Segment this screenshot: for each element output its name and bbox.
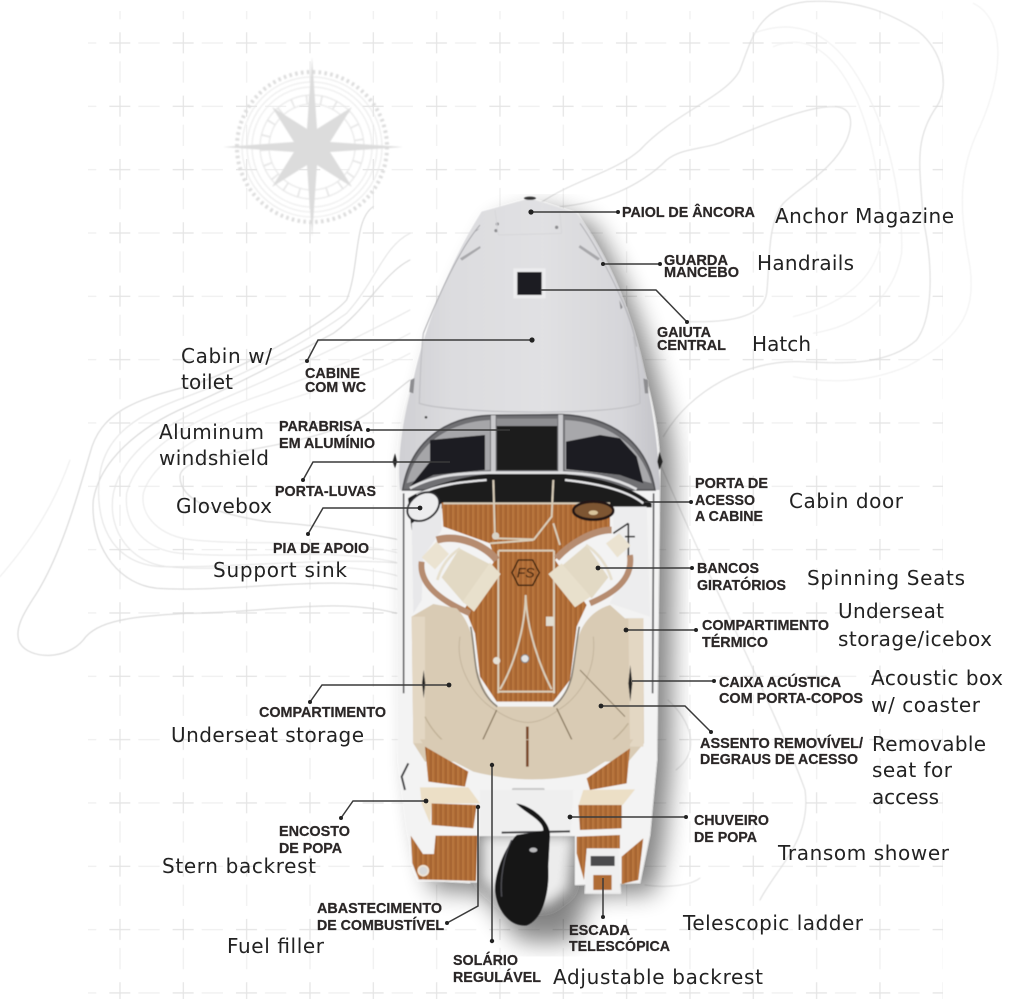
label: cabin door: ACESSO xyxy=(695,492,755,509)
label: sink: PIA DE APOIO xyxy=(273,540,369,557)
leader: ladder xyxy=(601,878,605,919)
label: fuel filler xyxy=(227,900,444,958)
label: spinning seats xyxy=(697,560,965,594)
leader lines xyxy=(301,209,716,943)
left platform xyxy=(410,833,478,882)
side rails xyxy=(404,493,654,693)
windshield posts xyxy=(493,415,561,473)
bench lower edge xyxy=(420,739,633,779)
support sink xyxy=(402,486,445,527)
label: anchor magazine xyxy=(622,203,954,228)
label: spinning seats: Spinning Seats xyxy=(807,566,965,590)
label: icebox: storage/icebox xyxy=(838,627,992,651)
cockpit side panels xyxy=(412,503,442,613)
teak step left xyxy=(425,747,468,787)
right backrest xyxy=(579,789,635,805)
leader: fuel filler xyxy=(445,805,480,925)
label: handrails: Handrails xyxy=(757,251,854,275)
leader: underseat storage xyxy=(308,683,451,704)
label: underseat storage xyxy=(171,704,386,747)
label: icebox: COMPARTIMENTO xyxy=(702,617,829,634)
label: fuel filler: ABASTECIMENTO xyxy=(317,900,442,917)
hull side spindles xyxy=(393,452,663,470)
label: hatch: CENTRAL xyxy=(657,337,726,354)
label: stern backrest: Stern backrest xyxy=(162,854,316,878)
foredeck xyxy=(393,197,663,490)
label: underseat storage: Underseat storage xyxy=(171,723,364,747)
ladder xyxy=(585,848,621,893)
label: glovebox: Glovebox xyxy=(176,494,272,518)
label: cabin xyxy=(181,344,366,396)
floor seams xyxy=(443,480,610,693)
label: glovebox xyxy=(176,483,376,518)
label: acoustic box: COM PORTA-COPOS xyxy=(719,690,863,707)
label: cabin door: A CABINE xyxy=(695,508,763,525)
leader: sink xyxy=(306,506,422,536)
label: windshield xyxy=(159,418,375,470)
outboard motor xyxy=(495,803,550,925)
right outer teak xyxy=(622,838,643,884)
motor bracket xyxy=(502,831,570,833)
label: removable seat: DEGRAUS DE ACESSO xyxy=(700,751,858,768)
label: acoustic box: w/ coaster xyxy=(871,693,981,717)
label: spinning seats: GIRATÓRIOS xyxy=(697,576,786,594)
steering wheel xyxy=(573,502,613,520)
left seat xyxy=(421,538,501,613)
label: cabin: toilet xyxy=(181,370,233,394)
cleat xyxy=(418,866,428,876)
label: glovebox: PORTA-LUVAS xyxy=(275,483,376,500)
leader: spinning seats xyxy=(596,566,694,570)
leader: adjustable backrest xyxy=(490,763,494,943)
leader: removable seat xyxy=(599,704,713,734)
label: ladder xyxy=(569,911,864,955)
label: hatch: Hatch xyxy=(752,332,811,356)
label: cabin door xyxy=(695,475,904,525)
leader: cabin door xyxy=(645,500,693,504)
label: spinning seats: BANCOS xyxy=(697,560,759,577)
label: handrails: GUARDA xyxy=(664,252,728,269)
label: sink: Support sink xyxy=(213,558,347,582)
hull xyxy=(397,198,660,885)
boat shadow xyxy=(411,208,674,942)
label: removable seat xyxy=(700,732,986,809)
cockpit xyxy=(402,474,654,762)
contours: left landmass xyxy=(0,207,410,655)
left side rail xyxy=(402,763,408,790)
label: transom shower: CHUVEIRO xyxy=(694,812,769,829)
compass rose xyxy=(223,57,403,237)
compass rings xyxy=(237,72,387,222)
label: anchor magazine: Anchor Magazine xyxy=(775,204,954,228)
label: handrails: MANCEBO xyxy=(664,264,739,281)
helm white arc xyxy=(417,480,643,503)
left backrest xyxy=(420,787,480,823)
stern xyxy=(402,739,643,925)
leader: windshield xyxy=(366,428,510,432)
label: removable seat: seat for xyxy=(872,758,953,782)
left seat teak xyxy=(432,803,477,828)
label: anchor magazine: PAIOL DE ÂNCORA xyxy=(622,203,755,221)
deck fittings xyxy=(409,222,648,419)
label: removable seat: access xyxy=(872,785,939,809)
label: windshield: PARABRISA xyxy=(279,418,363,435)
contours: right landmass xyxy=(540,1,998,437)
label: acoustic box xyxy=(719,666,1003,717)
leader: hatch xyxy=(541,290,689,324)
bench side strips xyxy=(412,617,643,747)
label: transom shower xyxy=(694,812,950,865)
inner rim of bench xyxy=(471,627,579,707)
windshield frame xyxy=(403,415,655,490)
compass star xyxy=(223,57,403,237)
label: ladder: TELESCÓPICA xyxy=(569,937,670,955)
label: cabin: CABINE xyxy=(305,365,360,382)
leader: handrails xyxy=(601,262,662,266)
label: icebox: TÉRMICO xyxy=(702,634,768,651)
teak floor xyxy=(442,503,610,702)
label: cabin: COM WC xyxy=(305,379,366,396)
hatch xyxy=(513,268,546,298)
label: removable seat: ASSENTO REMOVÍVEL/ xyxy=(700,735,864,752)
right seat teak xyxy=(578,805,622,830)
leader: acoustic box xyxy=(632,679,716,683)
label: stern backrest xyxy=(162,823,350,878)
label: handrails xyxy=(664,251,854,281)
leader: stern backrest xyxy=(339,799,428,820)
label: acoustic box: CAIXA ACÚSTICA xyxy=(719,673,841,691)
label: cabin door: Cabin door xyxy=(789,489,904,513)
label: hatch: GAIUTA xyxy=(657,324,711,341)
right platform xyxy=(577,835,620,880)
label: transom shower: Transom shower xyxy=(777,841,950,865)
transom deck xyxy=(480,790,573,835)
label: windshield: windshield xyxy=(159,446,269,470)
label: ladder: Telescopic ladder xyxy=(682,911,864,935)
deck edge lines xyxy=(419,333,640,412)
label: cabin: Cabin w/ xyxy=(181,344,272,368)
label: underseat storage: COMPARTIMENTO xyxy=(259,704,386,721)
console dark area xyxy=(408,474,652,530)
windshield: right pane xyxy=(565,420,652,483)
label: removable seat: Removable xyxy=(872,732,986,756)
label: fuel filler: Fuel filler xyxy=(227,934,325,958)
floor fittings xyxy=(492,532,554,664)
hexagon logo: FS xyxy=(517,564,535,580)
label: acoustic box: Acoustic box xyxy=(871,666,1003,690)
label: icebox xyxy=(702,599,992,651)
leader: transom shower xyxy=(568,815,688,819)
label: fuel filler: DE COMBUSTÍVEL xyxy=(317,917,444,934)
teak step right xyxy=(587,748,630,790)
label: cabin door: PORTA DE xyxy=(695,475,768,492)
swim platform shade xyxy=(482,835,574,905)
label: stern backrest: DE POPA xyxy=(279,840,342,857)
label: windshield: EM ALUMÍNIO xyxy=(279,435,375,452)
hexagon logo xyxy=(512,560,539,585)
contours: lower right xyxy=(650,440,806,900)
bow tip xyxy=(524,197,536,200)
label: hatch xyxy=(657,324,811,356)
label: icebox: Underseat xyxy=(838,599,944,623)
label: adjustable backrest: REGULÁVEL xyxy=(453,969,541,986)
acoustic boxes xyxy=(422,665,632,702)
label: adjustable backrest xyxy=(453,952,763,989)
leader: cabin xyxy=(305,337,535,363)
leader: icebox xyxy=(624,628,698,632)
label: stern backrest: ENCOSTO xyxy=(279,823,350,840)
label: windshield: Aluminum xyxy=(159,420,264,444)
label: transom shower: DE POPA xyxy=(694,829,757,846)
label: ladder: ESCADA xyxy=(569,922,630,939)
windshield: left pane xyxy=(407,420,490,483)
label: adjustable backrest: Adjustable backrest xyxy=(553,965,763,989)
windshield: centre pane xyxy=(497,419,557,470)
boat top view xyxy=(393,197,674,942)
label: adjustable backrest: SOLÁRIO xyxy=(453,952,518,969)
throttle xyxy=(613,523,635,560)
right seat xyxy=(548,530,631,607)
label: sink xyxy=(213,540,369,582)
U-shaped bench xyxy=(412,604,644,762)
leader: anchor magazine xyxy=(528,209,620,215)
bench seams xyxy=(425,637,628,760)
leader: glovebox xyxy=(301,462,450,482)
